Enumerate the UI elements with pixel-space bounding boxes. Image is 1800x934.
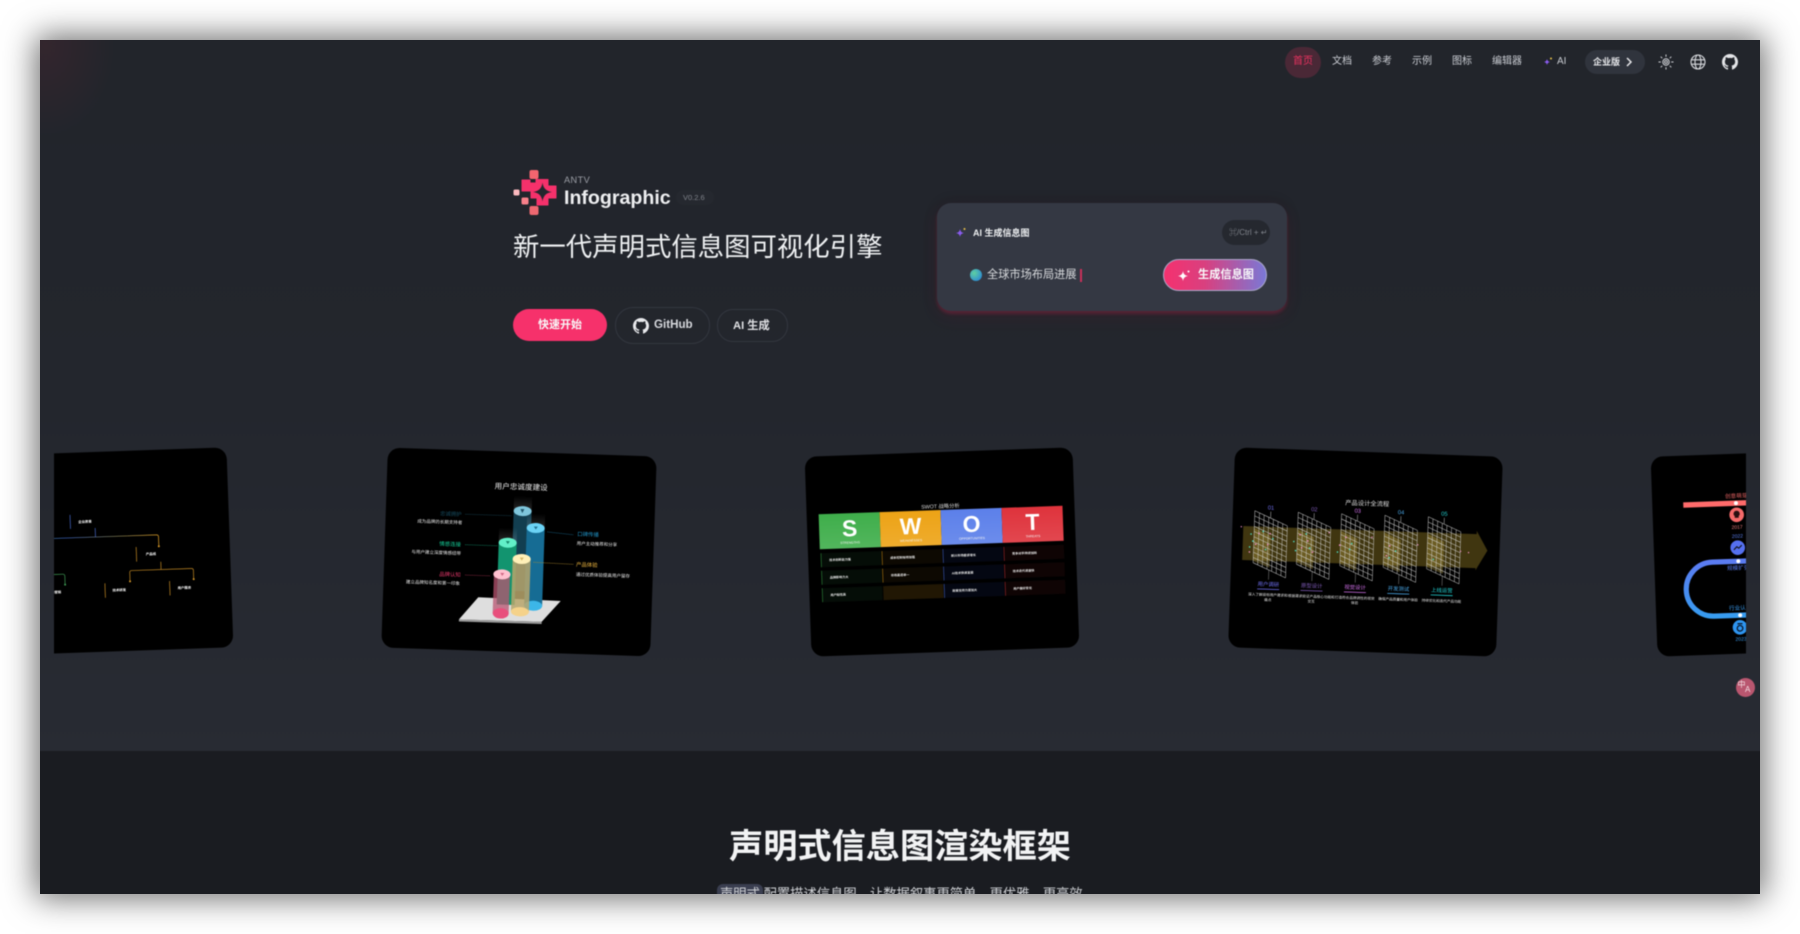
- SWOT header band: T: [1025, 509, 1040, 535]
- nav item: home active: 首页: [1293, 56, 1313, 67]
- cylinder 4 blue: [524, 513, 545, 611]
- cylinder 5 teal: [511, 496, 532, 591]
- step numbers: 01: [1268, 506, 1274, 512]
- SWOT cells: 竞争对手持续加码: [1012, 550, 1037, 556]
- SWOT cells: 用户偏好变化: [1013, 585, 1032, 591]
- red timeline bar: [1683, 496, 1800, 508]
- SWOT header band: STRENGTHS: [840, 540, 860, 545]
- SWOT header band: OPPORTUNITIES: [959, 536, 985, 541]
- labels right: 产品体验: [576, 560, 598, 569]
- process arrow band: [1242, 523, 1488, 571]
- button: GitHub: [615, 307, 710, 344]
- shortcut hint: [1222, 220, 1270, 245]
- SWOT cells: AI技术快速发展: [952, 570, 973, 575]
- step descriptions: 交互: [1307, 599, 1315, 604]
- icon: globe emoji: [970, 269, 982, 281]
- process title: 产品设计全流程: [1345, 498, 1390, 508]
- SWOT cells: 市场渠道单一: [891, 572, 909, 578]
- milestone labels: 2017: [1731, 525, 1743, 531]
- SWOT header band: W: [899, 513, 922, 539]
- enterprise pill: 企业版: [1593, 57, 1620, 67]
- labels right: 用户主动推荐和分享: [577, 540, 618, 548]
- keyword highlight: [717, 884, 763, 908]
- step descriptions: 打造符合品牌调性的视觉: [1335, 594, 1375, 601]
- cylinder 2 yellow: [511, 554, 531, 617]
- card: org chart: 用户服务: [178, 585, 192, 590]
- step labels: 原型设计: [1301, 581, 1323, 590]
- SWOT title: SWOT 战略分析: [921, 501, 960, 511]
- step numbers: 02: [1311, 507, 1318, 513]
- hero headline: 新一代声明式信息图可视化引擎: [513, 232, 882, 262]
- nav item: docs: 文档: [1332, 56, 1352, 67]
- step descriptions: 确保产品质量和用户体验: [1378, 596, 1418, 602]
- SWOT cells: 政策支持力度加大: [952, 587, 977, 593]
- button: generate infographic: [1163, 259, 1267, 291]
- icon: language globe: [1690, 54, 1706, 70]
- cylinder 3 green: [497, 527, 517, 605]
- platform base: [459, 597, 561, 625]
- grid panels: [1239, 510, 1470, 587]
- SWOT header band: O: [962, 511, 981, 537]
- SWOT cells: [821, 545, 1066, 602]
- text cursor: [1080, 269, 1082, 282]
- card: timeline path: [1651, 447, 1800, 657]
- button: AI generate: AI 生成: [733, 320, 770, 332]
- labels left: 忠诚拥护: [440, 509, 462, 518]
- step numbers: 03: [1354, 509, 1361, 515]
- step numbers: [1268, 506, 1448, 518]
- SWOT cells: 技术创新能力强: [829, 556, 852, 562]
- icon: sparkle button: [1178, 270, 1190, 281]
- SWOT header band: [819, 506, 1064, 549]
- labels left: 成为品牌的长期支持者: [417, 518, 463, 526]
- step labels: 视觉设计: [1344, 583, 1367, 592]
- panel: AI generator: [937, 203, 1287, 311]
- enterprise pill: [1585, 50, 1645, 74]
- translate floating button: A: [1745, 685, 1750, 694]
- cylinder 1 pink: [492, 569, 511, 619]
- version badge: [676, 190, 714, 205]
- step descriptions: 深入了解目标用户需求和: [1248, 591, 1288, 598]
- brand name: ANTV: ANTV: [564, 175, 590, 185]
- button: GitHub: GitHub: [654, 318, 693, 331]
- card: org chart: 企业愿景: [78, 519, 92, 524]
- nav item: icons: 图标: [1452, 56, 1472, 67]
- icon: github: [1721, 53, 1739, 70]
- step numbers: 05: [1441, 512, 1448, 518]
- button: quick start: [513, 309, 607, 341]
- input text: 全球市场布局进展: [987, 269, 1077, 281]
- card title: 用户忠诚度建设: [494, 481, 548, 492]
- carousel of infographic cards: [54, 447, 1747, 657]
- step underlines: [1257, 589, 1453, 596]
- step labels: 开发测试: [1388, 584, 1410, 593]
- milestone labels: 2022: [1732, 534, 1743, 540]
- icon: github mark: [632, 317, 650, 334]
- SWOT cells: 成本控制有待加强: [890, 554, 916, 560]
- button: AI generate: [717, 309, 788, 342]
- section heading: 声明式信息图渲染框架: [729, 828, 1071, 866]
- milestone icons: [1729, 507, 1748, 635]
- step labels: [1257, 580, 1453, 595]
- step descriptions: 根据需求验证产品核心功能和: [1288, 593, 1335, 599]
- card: SWOT analysis: [805, 447, 1079, 657]
- icon: sun theme: [1658, 54, 1674, 70]
- icon: Infographic logo: [512, 169, 558, 216]
- nav item: reference: 参考: [1372, 56, 1392, 67]
- labels right: 口碑传播: [577, 530, 600, 539]
- version badge: V0.2.6: [683, 193, 705, 202]
- top navigation bar: [1284, 46, 1739, 78]
- SWOT cells: 新兴市场需求增长: [951, 552, 977, 558]
- labels left: [406, 508, 463, 587]
- panel title: AI 生成信息图: [973, 228, 1030, 238]
- labels left: 品牌认知: [439, 570, 461, 579]
- SWOT header band: THREATS: [1026, 534, 1040, 539]
- SWOT cells: 技术迭代速度快: [1013, 567, 1035, 573]
- step descriptions: 持续优化和迭代产品功能: [1422, 597, 1462, 604]
- nav item: editor: 编辑器: [1492, 56, 1522, 67]
- step labels: 上线运营: [1431, 586, 1453, 595]
- nav item: examples: 示例: [1412, 56, 1432, 67]
- milestone labels: [1724, 491, 1753, 643]
- step descriptions: 痛点: [1264, 597, 1272, 602]
- card: user loyalty 3D cylinders: [381, 448, 657, 656]
- SWOT cells: 品牌影响力大: [830, 574, 848, 580]
- leader lines: [463, 514, 575, 579]
- nav item: home active: [1285, 47, 1321, 78]
- card: org chart: [0, 447, 233, 657]
- labels right: 通过优质体验提高用户留存: [576, 571, 631, 580]
- blue U-turn path: [1685, 557, 1800, 617]
- timeline markers: [1734, 501, 1742, 617]
- card: org chart: 技术研发: [112, 587, 127, 592]
- step labels: 用户调研: [1257, 580, 1280, 589]
- SWOT header band: WEAKNESSES: [900, 538, 922, 543]
- icon: sparkle title: [956, 227, 966, 237]
- SWOT cells: 用户粘性高: [830, 592, 846, 597]
- labels right: [576, 530, 632, 580]
- icon: AI sparkle: [1544, 56, 1553, 66]
- labels left: 情感连接: [439, 540, 462, 548]
- step numbers: 04: [1398, 510, 1405, 516]
- section: framework intro: [0, 751, 1800, 934]
- card: org chart: 产品线: [146, 551, 157, 556]
- nav item: AI: AI: [1557, 56, 1566, 67]
- button: quick start: 快速开始: [538, 319, 582, 331]
- SWOT header band: S: [841, 515, 858, 541]
- brand name: Infographic: Infographic: [564, 186, 671, 208]
- labels left: 建立品牌知名度和第一印象: [406, 578, 461, 587]
- translate floating button: [1736, 678, 1754, 697]
- button: generate infographic: 生成信息图: [1198, 269, 1254, 281]
- step descriptions: 体验: [1351, 600, 1359, 605]
- step descriptions: [1248, 591, 1462, 609]
- card: product design process: [1228, 447, 1503, 657]
- labels left: 与用户建立深度情感纽带: [411, 548, 462, 557]
- shortcut hint: ⌘/Ctrl + ↵: [1229, 228, 1267, 237]
- translate floating button: 中: [1738, 680, 1746, 688]
